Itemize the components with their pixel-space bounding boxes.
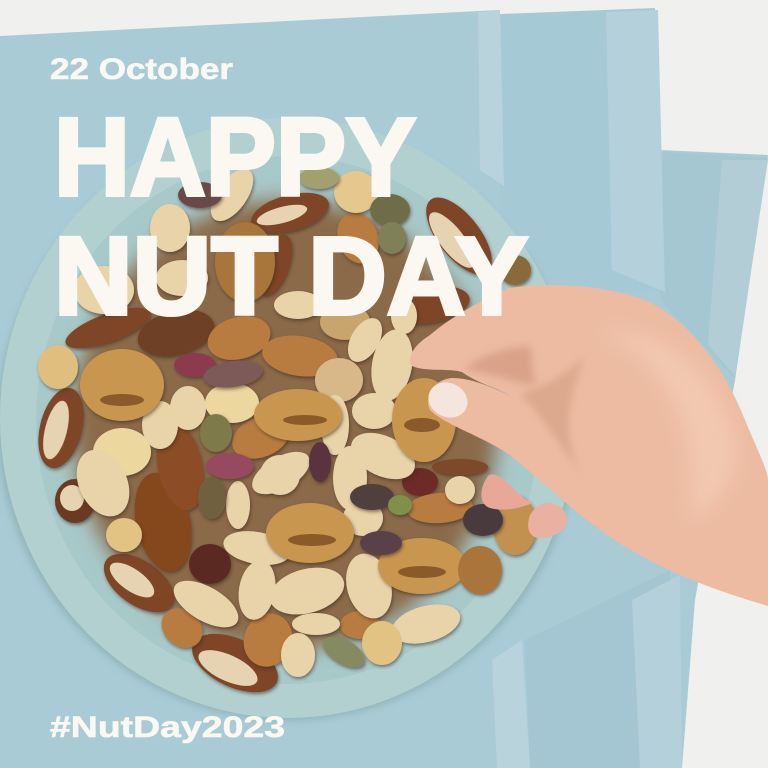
nuts: dark underlay (73, 200, 497, 650)
date label: 22 October (50, 53, 233, 86)
title line: HAPPY: HAPPY (54, 96, 416, 219)
nuts: walnuts (80, 222, 537, 594)
icon: hand picking a nut (410, 285, 768, 606)
nuts: Brazil nut pale flesh (38, 201, 482, 693)
panel: plate (0, 118, 578, 720)
nuts: cashews and macadamias (38, 162, 475, 677)
hashtag: #NutDay2023 (50, 711, 285, 744)
nuts: pistachios (174, 167, 531, 674)
nuts: almonds and pecans (126, 207, 488, 674)
nuts: walnut texture (100, 394, 446, 578)
icon: thumbnail (423, 376, 473, 424)
title line: NUT DAY: NUT DAY (54, 215, 528, 338)
nuts: Brazil nuts (31, 185, 504, 704)
